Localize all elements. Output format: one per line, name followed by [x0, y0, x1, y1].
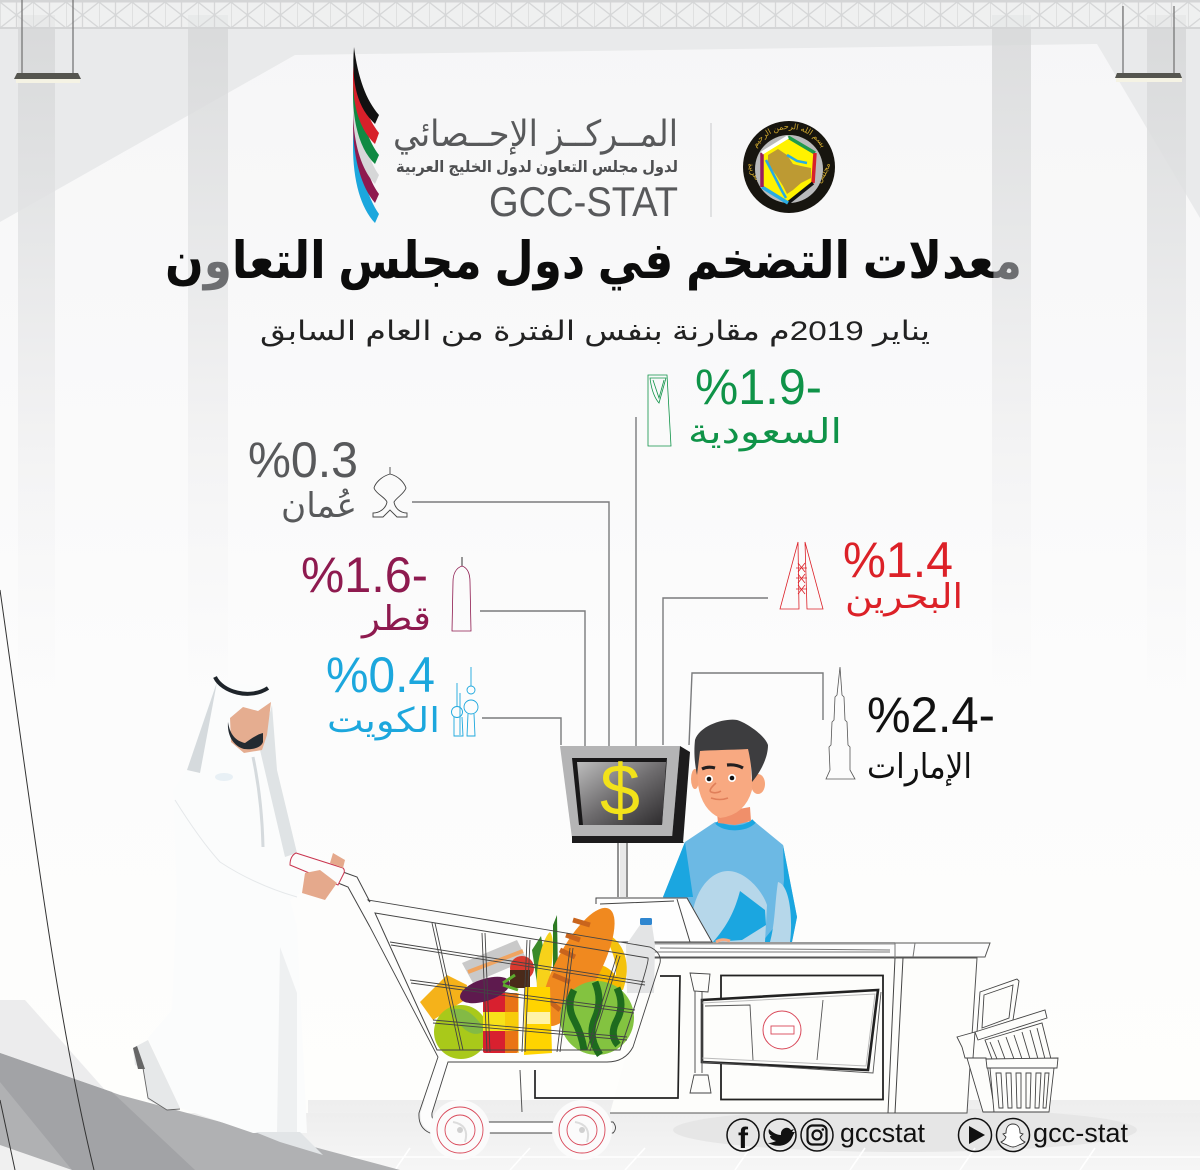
handle: gcc-stat: gcc-stat: [1033, 1118, 1128, 1148]
country name: البحرين: [845, 578, 963, 617]
cuff: [290, 853, 344, 885]
main title: معدلات التضخم في دول مجلس التعاون: [165, 232, 1022, 291]
icon: youtube: [958, 1118, 992, 1152]
banana: [603, 932, 627, 990]
logo divider: [710, 123, 712, 217]
groceries: [420, 898, 655, 1059]
icon: Bahrain WTC: [780, 542, 823, 609]
shopper in thobe: [133, 677, 370, 1155]
stat: UAE: [826, 667, 995, 787]
wheels: [430, 1100, 612, 1160]
floor: [0, 1100, 1200, 1170]
logo latin name: GCC-STAT: [489, 178, 678, 225]
tomato and jar: [510, 956, 534, 980]
bottle: [626, 918, 655, 993]
till: [596, 898, 712, 942]
checkout counter: [520, 942, 990, 1113]
cash register monitor: [560, 746, 690, 897]
ceiling lamp right: [1115, 6, 1182, 82]
value: %1.4: [843, 532, 953, 588]
nose and mouth: [710, 783, 728, 800]
watermelon: [560, 981, 634, 1055]
egg carton: [462, 940, 527, 983]
cashier: [596, 720, 797, 942]
connector lines: [412, 417, 823, 746]
subtitle: يناير 2019م مقارنة بنفس الفترة من العام السابق: [260, 316, 930, 347]
social handles: [727, 1118, 1128, 1155]
stat: Kuwait: [326, 647, 478, 741]
icon: Kuwait towers: [452, 667, 478, 736]
value: %1.9-: [695, 359, 822, 415]
logo arabic name: المــركــز الإحــصائي: [393, 113, 678, 155]
eyebrows: [702, 765, 743, 769]
icon: Kingdom Centre tower: [648, 375, 671, 446]
face: [230, 702, 271, 753]
icon: twitter: [764, 1119, 796, 1151]
logo arabic subtitle: لدول مجلس التعاون لدول الخليج العربية: [396, 159, 678, 176]
GCC emblem: [743, 121, 835, 213]
eyes: [705, 774, 736, 783]
agal: [215, 677, 268, 694]
beard: [228, 722, 263, 749]
logo ribbon: [353, 47, 379, 223]
stat: Qatar: [301, 547, 471, 639]
country name: السعودية: [688, 413, 842, 452]
cart frame: [368, 900, 660, 1133]
icon: instagram: [801, 1119, 833, 1151]
icon: Doha tower: [461, 557, 463, 566]
can: [483, 993, 518, 1053]
front shoe: [255, 1132, 323, 1155]
juice box: [524, 987, 552, 1055]
floor wedge bottom-left: [0, 590, 400, 1170]
GCC emblem: بسم الله الرحمن الرحيم: [755, 123, 824, 149]
bread: [528, 898, 628, 1036]
no-entry sign: [763, 1011, 801, 1049]
icon: Oman monument: [373, 467, 407, 517]
handle: gccstat: gccstat: [840, 1118, 925, 1148]
stat: Bahrain: [780, 532, 963, 617]
cart tube halo: [426, 1062, 612, 1127]
ears: [691, 769, 699, 789]
hair: [694, 720, 768, 782]
value: %0.4: [326, 647, 435, 703]
country name: عُمان: [281, 487, 357, 525]
icon: facebook: f: [738, 1122, 749, 1155]
eggplant: [457, 972, 513, 1008]
value: %2.4-: [867, 687, 995, 743]
stat: Oman: [248, 432, 407, 525]
icon: facebook: [727, 1119, 759, 1155]
ceiling lamp left: [14, 0, 81, 83]
dollar sign: $: [600, 751, 640, 831]
wheel rear: [430, 1100, 490, 1160]
wheel front: [552, 1100, 612, 1160]
gate: [690, 973, 881, 1093]
stat: Saudi Arabia: [648, 359, 842, 452]
value: %0.3: [248, 432, 358, 488]
value: %1.6-: [301, 547, 428, 603]
shopping baskets: [957, 979, 1058, 1112]
GCC emblem: مجلس التعاون لدول الخليج العربية: [748, 164, 830, 188]
icon: Burj Khalifa: [826, 667, 855, 779]
robe: [148, 680, 307, 1133]
neck: [717, 807, 751, 825]
GCC-STAT logo: [353, 47, 678, 225]
icon: snapchat: [996, 1118, 1030, 1152]
country name: الإمارات: [867, 748, 972, 787]
back shoe: [133, 1040, 180, 1110]
hands: [330, 853, 345, 868]
shopping cart: [368, 898, 660, 1160]
torso: [663, 822, 797, 942]
corn: [532, 936, 552, 995]
robe shading: [175, 682, 297, 1133]
face: [697, 747, 752, 818]
cheese: [420, 975, 467, 1020]
country name: الكويت: [327, 702, 440, 741]
lettuce: [434, 1005, 488, 1059]
cart handle: [338, 872, 370, 927]
country name: قطر: [360, 600, 431, 639]
